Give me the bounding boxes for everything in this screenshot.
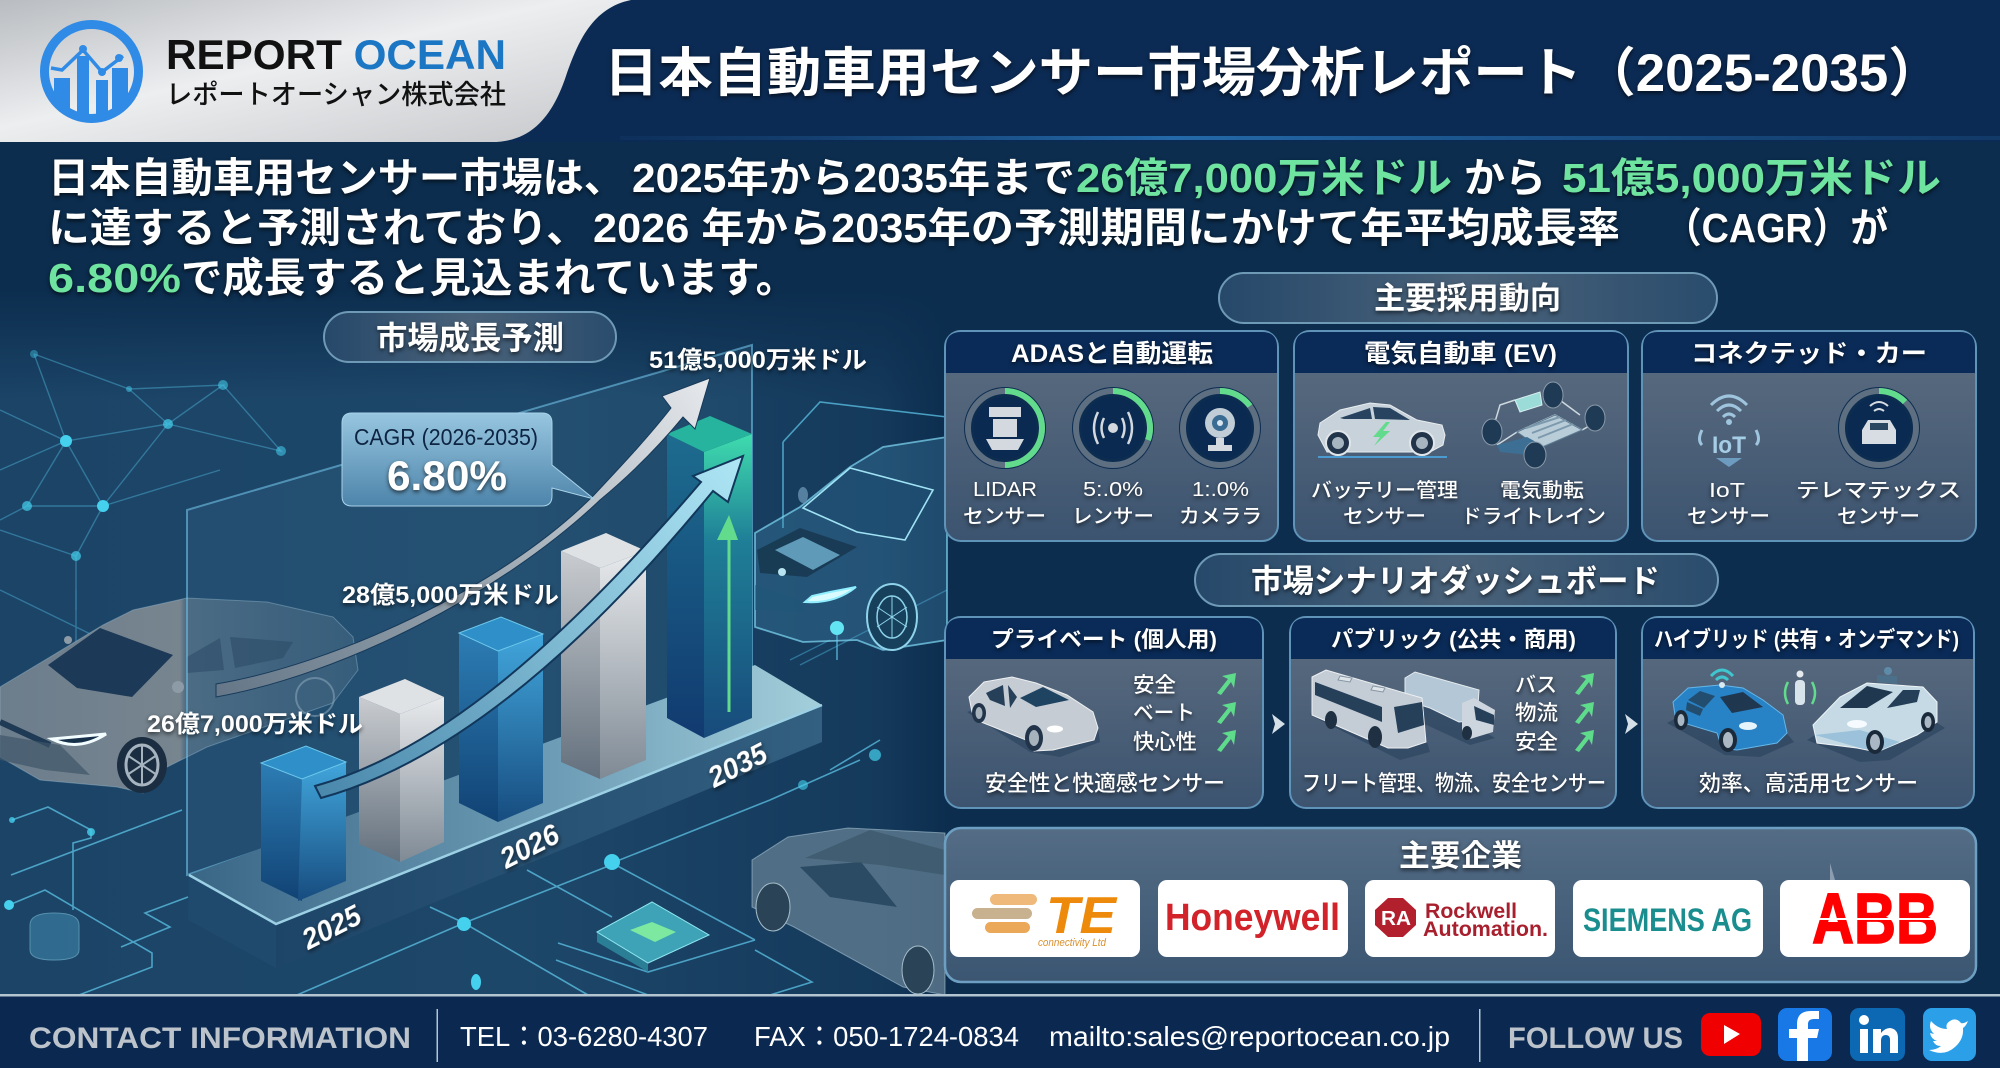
label: battery management sensor bbox=[1311, 479, 1458, 528]
icon: sedan bbox=[967, 677, 1100, 757]
panel title: プライベート (個人用) bbox=[991, 627, 1217, 652]
logo: TE connectivity bbox=[950, 880, 1140, 957]
label: LIDAR sensor: センサー bbox=[963, 506, 1046, 528]
panel: electric vehicles bbox=[1294, 331, 1628, 541]
icon: Facebook bbox=[1778, 1008, 1832, 1061]
gauge: telematics bbox=[1838, 387, 1920, 469]
intro paragraph: （CAGR）が bbox=[1664, 205, 1888, 251]
value label 2035: 51億5,000万米ドル bbox=[649, 347, 867, 374]
illustration: wireframe car right bbox=[755, 437, 947, 650]
intro paragraph: 2025年から2035年まで bbox=[632, 155, 1075, 201]
logo japanese name: レポートオーシャン株式会社 bbox=[166, 80, 506, 110]
intro paragraph bbox=[48, 155, 1941, 301]
label: IoT sensor: IoT bbox=[1709, 480, 1745, 502]
icon: LinkedIn bbox=[1850, 1008, 1905, 1061]
label: battery management sensor: センサー bbox=[1343, 506, 1426, 528]
icon: report ocean logo bbox=[44, 24, 138, 130]
icon: EV drivetrain bbox=[1482, 382, 1605, 468]
illustration: ghost car lower right bbox=[752, 828, 945, 995]
label: camera: 1:.0% bbox=[1192, 479, 1249, 501]
logo: Siemens AG: SIEMENS AG bbox=[1583, 902, 1752, 938]
logo: Honeywell bbox=[1158, 880, 1348, 957]
label: telematics sensor: センサー bbox=[1837, 506, 1920, 528]
icon: blue car bbox=[1667, 670, 1794, 757]
icon: shared link bbox=[1785, 670, 1815, 705]
logo: Siemens AG bbox=[1573, 880, 1763, 957]
panel title: ADASと自動運転 bbox=[1011, 340, 1213, 368]
caption: 安全性と快適感センサー bbox=[985, 771, 1225, 796]
label: safety: 安全 bbox=[1133, 674, 1176, 697]
logo: Rockwell Automation: RA bbox=[1381, 908, 1411, 930]
year 2025: 2025 bbox=[296, 899, 368, 957]
bar silver 2 bbox=[561, 533, 646, 779]
label: electric drivetrain: ドライトレイン bbox=[1461, 506, 1606, 528]
label: LIDAR sensor bbox=[963, 479, 1046, 528]
value label 2025: 26億7,000万米ドル bbox=[147, 711, 363, 738]
label: telematics sensor bbox=[1796, 479, 1961, 528]
panel: ADAS bbox=[945, 331, 1278, 541]
label: seat: ベート bbox=[1133, 702, 1195, 725]
label: battery management sensor: バッテリー管理 bbox=[1311, 479, 1458, 502]
heading: market scenario dashboard bbox=[1195, 554, 1718, 606]
header: title bar and logo bbox=[0, 0, 2000, 142]
gauge: camera bbox=[1179, 387, 1261, 469]
icon: Twitter bbox=[1923, 1008, 1976, 1061]
panel title: 主要企業 bbox=[1399, 840, 1522, 873]
panel title: パブリック (公共・商用) bbox=[1331, 627, 1576, 652]
icon: trend arrows bbox=[1217, 673, 1236, 752]
follow us: FOLLOW US bbox=[1508, 1022, 1683, 1055]
icon: IoT: IoT bbox=[1712, 432, 1746, 459]
icon: IoT bbox=[1700, 396, 1758, 467]
logo: TE connectivity: connectivity Ltd bbox=[1038, 937, 1107, 949]
fax: FAX：050-1724-0834 bbox=[754, 1021, 1019, 1052]
icon: autonomous car bbox=[1807, 667, 1945, 762]
platform bbox=[188, 665, 822, 968]
label: comfort: 快心性 bbox=[1133, 731, 1197, 754]
panel: connected car bbox=[1642, 331, 1976, 541]
icon: stacked sensor node bbox=[30, 913, 79, 960]
bar chart: market growth bbox=[147, 345, 867, 968]
panel: public bbox=[1290, 617, 1616, 808]
icon: green arrow in bar bbox=[717, 515, 738, 712]
icon: truck bbox=[1405, 672, 1495, 745]
bar 2026 bbox=[459, 617, 543, 822]
icon: electric car bbox=[1318, 403, 1447, 458]
panel title: 電気自動車 (EV) bbox=[1364, 340, 1557, 368]
label: LIDAR sensor: LIDAR bbox=[973, 479, 1037, 501]
arrow: blue growth bbox=[315, 456, 743, 798]
callout: CAGR: 6.80% bbox=[387, 452, 507, 499]
label: camera bbox=[1179, 479, 1262, 528]
label: IoT sensor: センサー bbox=[1687, 506, 1770, 528]
heading: key adoption trends bbox=[1219, 273, 1717, 323]
title: 日本自動車用センサー市場分析レポート bbox=[604, 44, 1582, 103]
logo: Rockwell Automation: Automation. bbox=[1423, 918, 1548, 941]
logo: ABB bbox=[1780, 863, 1970, 959]
telephone: TEL：03-6280-4307 bbox=[460, 1021, 708, 1052]
arrow: private to public bbox=[1272, 714, 1285, 734]
logo panel bbox=[0, 0, 631, 142]
intro paragraph: 26億7,000万米ドル bbox=[1076, 155, 1452, 201]
heading: market growth forecast bbox=[324, 312, 616, 362]
gauge: LIDAR bbox=[964, 387, 1046, 469]
label: telematics sensor: テレマテックス bbox=[1796, 479, 1961, 502]
label: radar sensor: 5:.0% bbox=[1083, 479, 1143, 501]
intro paragraph: 日本自動車用センサー市場は、 bbox=[48, 155, 625, 201]
panel title: ハイブリッド (共有・オンデマンド) bbox=[1654, 627, 1959, 652]
year 2026: 2026 bbox=[494, 818, 566, 876]
arrow: silver growth bbox=[216, 378, 710, 697]
illustration: circuit chip bbox=[597, 902, 709, 972]
intro paragraph: で成長すると見込まれています。 bbox=[181, 255, 797, 301]
panel: hybrid bbox=[1642, 617, 1974, 808]
label: logistics: 物流 bbox=[1515, 702, 1558, 725]
callout: CAGR: CAGR (2026-2035) bbox=[354, 424, 538, 450]
label: radar sensor bbox=[1072, 479, 1154, 528]
value label mid: 28億5,000万米ドル bbox=[342, 582, 559, 609]
intro paragraph: 51億5,000万米ドル bbox=[1562, 155, 1941, 201]
label: electric drivetrain: 電気動転 bbox=[1500, 479, 1584, 502]
panel title: コネクテッド・カー bbox=[1691, 340, 1927, 368]
bar silver 1 bbox=[359, 679, 444, 862]
intro paragraph: に達すると予測されており、 bbox=[48, 205, 588, 251]
logo: Rockwell Automation: Rockwell bbox=[1425, 900, 1517, 923]
logo wordmark: REPORT OCEAN bbox=[166, 31, 506, 78]
contact heading: CONTACT INFORMATION bbox=[29, 1022, 411, 1055]
icon: trend arrows bbox=[1575, 673, 1594, 752]
label: camera: カメララ bbox=[1179, 506, 1262, 528]
panel: private bbox=[945, 617, 1263, 808]
gauge: radar bbox=[1072, 387, 1154, 469]
title: （2025-2035） bbox=[1583, 44, 1941, 103]
heading: key adoption trends: 主要採用動向 bbox=[1374, 281, 1561, 316]
label: safety: 安全 bbox=[1515, 731, 1558, 754]
label: electric drivetrain bbox=[1461, 479, 1606, 528]
arrow: public to hybrid bbox=[1625, 714, 1638, 734]
logo: Honeywell: Honeywell bbox=[1165, 897, 1340, 939]
callout: CAGR bbox=[342, 413, 594, 506]
label: IoT sensor bbox=[1687, 480, 1770, 528]
panel: key companies bbox=[945, 828, 1976, 982]
heading: market growth forecast: 市場成長予測 bbox=[376, 320, 564, 356]
intro paragraph: 2026 年から2035年の予測期間にかけて年平均成長率 bbox=[593, 205, 1620, 251]
bar 2025 bbox=[261, 746, 346, 901]
email: mailto:sales@reportocean.co.jp bbox=[1049, 1021, 1450, 1052]
logo: ABB: ABB bbox=[1812, 880, 1938, 959]
icon: bus bbox=[1310, 670, 1430, 760]
caption: フリート管理、物流、安全センサー bbox=[1302, 771, 1606, 796]
icon: YouTube bbox=[1701, 1013, 1761, 1056]
logo: Rockwell Automation bbox=[1365, 880, 1555, 957]
footer: contact information bbox=[0, 994, 2000, 1068]
intro paragraph: 6.80% bbox=[48, 255, 181, 301]
caption: 効率、高活用センサー bbox=[1699, 771, 1918, 796]
logo: TE connectivity: TE bbox=[1046, 887, 1117, 945]
label: bus: バス bbox=[1515, 674, 1557, 697]
year 2035: 2035 bbox=[702, 737, 774, 795]
label: radar sensor: レンサー bbox=[1072, 506, 1154, 528]
bar 2035 bbox=[667, 416, 752, 738]
intro paragraph: から bbox=[1464, 155, 1546, 201]
background: circuit and network artwork bbox=[0, 290, 948, 995]
heading: market scenario dashboard: 市場シナリオダッシュボード bbox=[1251, 563, 1660, 599]
glass back panel bbox=[187, 345, 752, 875]
illustration: ghost car left bbox=[0, 598, 358, 793]
